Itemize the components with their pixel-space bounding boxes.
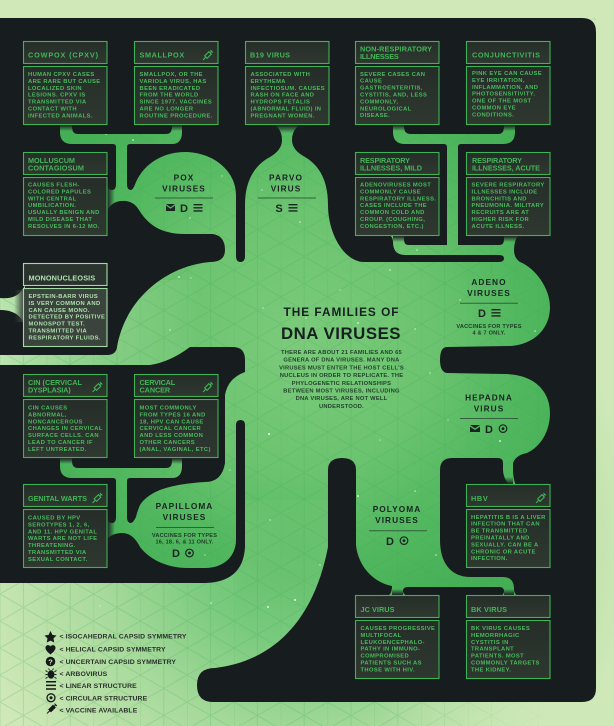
panel: cin: DYSPLASIA) xyxy=(28,385,71,394)
intro paragraph: VIRUSES MUST ENTER THE HOST CELL'S xyxy=(279,365,404,371)
intro paragraph: PHYLOGENETIC RELATIONSHIPS xyxy=(292,381,391,387)
panel: conjunctivitis: ONE OF THE MOST xyxy=(472,99,532,105)
panel: genital warts: TRANSMITTED VIA xyxy=(28,550,87,556)
panel: cin: LEFT UNTREATED. xyxy=(28,447,87,453)
panel: respiratory illnesses acute: HIGHER RISK FOR xyxy=(472,217,529,223)
panel: cervical cancer: OTHER CANCERS xyxy=(140,440,195,446)
panel: respiratory illnesses mild xyxy=(356,152,439,242)
legend item: vaccine: < VACCINE AVAILABLE xyxy=(60,708,138,715)
legend item: isocahedral: < ISOCAHEDRAL CAPSID SYMMETRY xyxy=(60,634,187,641)
panel: non-respiratory illnesses: NON-RESPIRATORY xyxy=(360,45,432,54)
panel: respiratory illnesses acute: ACUTE ILLNESS. xyxy=(472,224,524,230)
panel: cowpox: TRANSMITTED VIA xyxy=(28,100,87,106)
panel: mononucleosis xyxy=(14,264,107,346)
panel: smallpox: SINCE 1977. VACCINES xyxy=(140,100,212,106)
panel: genital warts: WARTS ARE NOT LIFE xyxy=(28,536,97,542)
panel: genital warts: THREATENING. xyxy=(28,543,76,549)
panel: b19 virus: PREGNANT WOMEN. xyxy=(250,113,315,119)
lobe label: pox viruses xyxy=(155,172,213,215)
legend item: linear: < LINEAR STRUCTURE xyxy=(60,683,137,690)
panel: cin: CIN CAUSES xyxy=(28,406,68,412)
panel: bk virus: THE KIDNEY. xyxy=(471,667,511,673)
panel: bk virus: CYSTITIS IN xyxy=(471,640,509,646)
intro paragraph: NUCLEUS IN ORDER TO REPLICATE. THE xyxy=(280,373,403,379)
panel: cowpox: LESIONS. CPXV IS xyxy=(28,93,86,99)
panel: molluscum contagiosum: USUALLY BENIGN AND xyxy=(28,210,100,216)
intro paragraph: GENERA OF DNA VIRUSES. MANY DNA xyxy=(283,358,400,364)
panel: bk virus: HEMORRHAGIC xyxy=(471,633,520,639)
panel: b19 virus: ASSOCIATED WITH xyxy=(250,72,310,78)
panel: smallpox: ROUTINE PROCEDURE. xyxy=(140,113,213,119)
lobe label: polyoma viruses xyxy=(369,504,427,548)
lobe label: papilloma viruses: 16, 18, 6, & 11 ONLY. xyxy=(155,540,214,546)
legend item: helical xyxy=(46,645,166,654)
lobe label: parvo virus: VIRUS xyxy=(271,183,301,193)
panel: hbv: SEXUALLY. CAN BE A xyxy=(471,542,539,548)
lobe label: parvo virus xyxy=(258,172,316,215)
panel: b19 virus xyxy=(246,42,329,133)
panel: cin: SURFACE CELLS. CAN xyxy=(28,433,99,439)
panel: smallpox: VARIOLA VIRUS, HAS xyxy=(140,79,207,85)
panel: cowpox: LOCALIZED SKIN xyxy=(28,86,82,92)
legend item: isocahedral xyxy=(44,631,187,642)
lobe label: papilloma viruses xyxy=(152,501,217,560)
panel: molluscum contagiosum: MILD DISEASE THAT xyxy=(28,217,92,223)
panel: non-respiratory illnesses: CAUSE xyxy=(360,79,382,85)
panel: jc virus: PATHY IN IMMUNO- xyxy=(360,647,420,653)
legend item: helical: < HELICAL CAPSID SYMMETRY xyxy=(60,646,166,654)
panel: jc virus: PATIENTS SUCH AS xyxy=(360,660,422,666)
panel: respiratory illnesses mild: CROUP. (COUGHING, xyxy=(360,217,425,223)
panel: cowpox xyxy=(24,42,107,131)
lobe label: adeno viruses: ADENO xyxy=(471,277,507,287)
panel: hbv: CHRONIC OR ACUTE xyxy=(471,549,536,555)
lobe label: papilloma viruses: VIRUSES xyxy=(163,512,206,522)
panel: respiratory illnesses mild: ADENOVIRUSES MOST xyxy=(360,182,431,188)
panel: b19 virus: ERYTHEMA xyxy=(250,79,286,85)
panel: molluscum contagiosum: CAUSES FLESH- xyxy=(28,182,80,188)
panel: respiratory illnesses acute: SEVERE RESPIRATORY xyxy=(472,182,545,188)
lobe label: adeno viruses xyxy=(456,277,522,336)
panel: respiratory illnesses acute xyxy=(466,152,550,242)
lobe label: papilloma viruses: PAPILLOMA xyxy=(156,501,213,511)
lobe label: adeno viruses: D xyxy=(478,308,486,320)
panel: respiratory illnesses mild: COMMON COLD AND xyxy=(360,210,425,216)
panel: bk virus: PATIENTS. MOST xyxy=(471,654,524,660)
panel: cowpox: CONTACT WITH xyxy=(28,106,77,112)
legend item: uncertain: < UNCERTAIN CAPSID SYMMETRY xyxy=(60,659,176,666)
panel: respiratory illnesses mild: COMMONLY CAUSE xyxy=(360,189,421,195)
title xyxy=(281,305,401,343)
panel: cin: LEAD TO CANCER IF xyxy=(28,440,93,446)
panel: mononucleosis: EPSTEIN-BARR VIRUS xyxy=(28,294,98,300)
panel: cervical cancer xyxy=(134,374,218,464)
panel: hbv: HEPATITIS B IS A LIVER xyxy=(471,515,546,521)
panel: mononucleosis: DETECTED BY POSITIVE xyxy=(28,315,105,321)
lobe label: adeno viruses: VIRUSES xyxy=(467,288,511,298)
lobe label: papilloma viruses: D xyxy=(172,548,180,560)
legend item: uncertain xyxy=(46,657,176,666)
panel: jc virus: CAUSES PROGRESSIVE xyxy=(360,626,435,632)
panel: non-respiratory illnesses: SEVERE CASES CAN xyxy=(360,72,425,78)
panel: smallpox: FROM THE WORLD xyxy=(140,93,199,99)
lobe label: hepadna virus: D xyxy=(485,424,493,436)
panel: cowpox: INFECTED ANIMALS. xyxy=(28,113,93,119)
panel: cowpox: ARE RARE BUT CAUSE xyxy=(28,79,101,85)
panel: non-respiratory illnesses: ILLNESSES xyxy=(360,52,399,61)
panel: non-respiratory illnesses: NEUROLOGICAL xyxy=(360,106,412,112)
lobe label: hepadna virus: VIRUS xyxy=(474,404,504,414)
panel: cervical cancer: MOST COMMONLY xyxy=(140,406,197,412)
panel: cin: CIN (CERVICAL xyxy=(28,378,83,387)
panel: molluscum contagiosum: MOLLUSCUM xyxy=(28,156,75,165)
panel: non-respiratory illnesses: COMMONLY, xyxy=(360,99,398,105)
panel: genital warts: CAUSED BY HPV xyxy=(28,516,81,522)
lobe label: adeno viruses: 4 & 7 ONLY. xyxy=(472,330,506,336)
panel: respiratory illnesses mild: RESPIRATORY xyxy=(360,156,410,165)
panel: non-respiratory illnesses: GASTROENTERITIS, xyxy=(360,86,423,92)
panel: cin: NONCANCEROUS xyxy=(28,419,83,425)
intro paragraph: UNDERSTOOD. xyxy=(319,404,364,410)
lattice fade at bottom right xyxy=(380,702,614,726)
panel: cervical cancer: FROM TYPES 16 AND xyxy=(140,412,206,418)
panel: molluscum contagiosum: COLORED PAPULES xyxy=(28,189,91,195)
panel: respiratory illnesses acute: RECRUITS ARE AT xyxy=(472,210,529,216)
lobe label: polyoma viruses: D xyxy=(386,536,394,548)
legend item: uncertain: ? xyxy=(48,657,53,666)
panel: smallpox xyxy=(134,42,218,131)
lobe label: pox viruses: VIRUSES xyxy=(162,183,206,193)
panel: smallpox: SMALLPOX xyxy=(140,51,184,60)
panel: genital warts: SEROTYPES 1, 2, 6, xyxy=(28,522,90,528)
virus body colour field xyxy=(0,30,590,625)
panel: b19 virus: INFECTIOSUM. CAUSES xyxy=(250,86,325,92)
panel: molluscum contagiosum: UMBILICATION. xyxy=(28,203,76,209)
panel: bk virus: TRANSPLANT xyxy=(471,647,514,653)
panel: conjunctivitis: COMMON EYE xyxy=(472,106,516,112)
panel: cervical cancer: AND LESS COMMON xyxy=(140,433,203,439)
panel: cowpox: HUMAN CPXV CASES xyxy=(28,72,95,78)
panel: genital warts: AND 11. HPV GENITAL xyxy=(28,529,97,535)
panel: conjunctivitis: PINK EYE CAN CAUSE xyxy=(472,71,542,77)
panel: respiratory illnesses acute: ILLNESSES INCLUDE xyxy=(472,189,538,195)
lobe label: hepadna virus xyxy=(460,393,518,436)
panel: hbv: INFECTION THAT CAN xyxy=(471,522,540,528)
panel: cowpox: COWPOX (CPXV) xyxy=(28,51,99,60)
sparkle specks xyxy=(99,133,536,608)
legend item: circular: < CIRCULAR STRUCTURE xyxy=(60,695,148,702)
intro paragraph: THERE ARE ABOUT 21 FAMILIES AND 65 xyxy=(281,350,402,356)
panel: mononucleosis: RESPIRATORY FLUIDS. xyxy=(28,335,101,341)
panel: jc virus: THOSE WITH HIV. xyxy=(360,667,415,673)
lobe label: polyoma viruses: POLYOMA xyxy=(373,504,421,514)
panel: respiratory illnesses acute: BRONCHITIS AND xyxy=(472,196,527,202)
lobe label: pox viruses: D xyxy=(180,203,188,215)
panel: jc virus: LEUKOENCEPHALO- xyxy=(360,640,425,646)
panel: hbv: PREINATALLY AND xyxy=(471,536,530,542)
panel: cin xyxy=(24,374,107,464)
panel: jc virus xyxy=(356,589,439,678)
panel: b19 virus: B19 VIRUS xyxy=(250,51,290,60)
legend item: arbovirus xyxy=(46,668,108,679)
panel: genital warts: SEXUAL CONTACT. xyxy=(28,557,88,563)
panel: conjunctivitis: CONJUNCTIVITIS xyxy=(472,51,540,60)
panel: respiratory illnesses acute: RESPIRATORY xyxy=(472,156,522,165)
panel: respiratory illnesses mild: RESPIRATORY ILLNESS. xyxy=(360,196,436,202)
panel: conjunctivitis: PHOTOSENSITIVITY. xyxy=(472,92,535,98)
lobe label: papilloma viruses: VACCINES FOR TYPES xyxy=(152,533,217,539)
panel: hbv xyxy=(466,477,550,568)
panel: cervical cancer: (ANAL, VAGINAL, ETC) xyxy=(140,447,211,453)
panel: jc virus: JC VIRUS xyxy=(360,605,395,614)
panel: mononucleosis: MONOSPOT TEST. xyxy=(28,322,85,328)
panel: smallpox: BEEN ERADICATED xyxy=(140,86,200,92)
panel: cin: ABNORMAL, xyxy=(28,412,67,418)
panel: cervical cancer: CERVICAL xyxy=(140,378,176,387)
panel: conjunctivitis: CONDITIONS. xyxy=(472,112,514,118)
lobe label: polyoma viruses: VIRUSES xyxy=(375,515,419,525)
lobe label: parvo virus: S xyxy=(275,203,283,215)
panel: cervical cancer: 18, HPV CAN CAUSE xyxy=(140,419,204,425)
panel: molluscum contagiosum: RESOLVES IN 6-12 MO. xyxy=(28,224,100,230)
panel: bk virus xyxy=(466,589,550,678)
panel: genital warts: GENITAL WARTS xyxy=(28,494,87,503)
panel: respiratory illnesses mild: CASES INCLUDE THE xyxy=(360,203,427,209)
panel: smallpox: SMALLPOX, OR THE xyxy=(140,72,203,78)
panel: cin: CHANGES IN CERVICAL xyxy=(28,426,103,432)
panel: non-respiratory illnesses xyxy=(356,42,439,131)
panel: molluscum contagiosum xyxy=(24,152,115,236)
panel: respiratory illnesses acute: PNEUMONIA. MILITARY xyxy=(472,203,544,209)
panel: bk virus: BK VIRUS CAUSES xyxy=(471,626,530,632)
intro paragraph: DNA VIRUSES, ARE NOT WELL xyxy=(296,396,388,402)
panel: respiratory illnesses acute: ILLNESSES, ACUTE xyxy=(472,163,540,172)
panel: cervical cancer: CANCER xyxy=(140,385,171,394)
panel: mononucleosis: TRANSMITTED VIA xyxy=(28,328,87,334)
panel: conjunctivitis: EYE IRRITATION, xyxy=(472,78,525,84)
legend item: vaccine xyxy=(46,704,138,715)
title: THE FAMILIES OF xyxy=(284,305,399,319)
intro paragraph: BETWEEN MOST VIRUSES, INCLUDING xyxy=(283,388,400,394)
panel: jc virus: COMPROMISED xyxy=(360,654,409,660)
panel: molluscum contagiosum: CONTAGIOSUM xyxy=(28,163,84,172)
panel: genital warts xyxy=(24,484,115,568)
panel: respiratory illnesses mild: ILLNESSES, MILD xyxy=(360,163,422,172)
panel: mononucleosis: MONONUCLEOSIS xyxy=(28,274,95,282)
panel: non-respiratory illnesses: DISEASE. xyxy=(360,113,390,119)
panel: non-respiratory illnesses: CYSTITIS, AND, LESS xyxy=(360,92,427,98)
panel: jc virus: MULTIFOCAL xyxy=(360,633,402,639)
lobe label: parvo virus: PARVO xyxy=(269,172,303,182)
lobe label: adeno viruses: VACCINES FOR TYPES xyxy=(456,324,522,330)
panel: bk virus: COMMONLY TARGETS xyxy=(471,660,540,666)
panel: hbv: INFECTION. xyxy=(471,556,508,562)
panel: mononucleosis: IS VERY COMMON AND xyxy=(28,301,101,307)
panel: mononucleosis: CAN CAUSE MONO. xyxy=(28,308,90,314)
panel: hbv: BE TRANSMITTED xyxy=(471,529,528,535)
panel: conjunctivitis: INFLAMMATION, AND xyxy=(472,85,538,91)
panel: respiratory illnesses mild: CONGESTION, ETC.) xyxy=(360,224,424,230)
panel: b19 virus: (ABNORMAL FLUID) IN xyxy=(250,106,321,112)
lobe label: hepadna virus: HEPADNA xyxy=(465,393,513,403)
legend xyxy=(44,631,187,715)
panel: smallpox: ARE NO LONGER xyxy=(140,106,194,112)
panel: b19 virus: HYDROPS FETALIS xyxy=(250,100,310,106)
legend item: linear xyxy=(46,681,137,690)
panel: hbv: HBV xyxy=(471,494,488,503)
panel: bk virus: BK VIRUS xyxy=(471,605,507,614)
lobe label: pox viruses: POX xyxy=(174,172,194,182)
panel: cervical cancer: CERVICAL CANCER xyxy=(140,426,201,432)
panel: b19 virus: RASH ON FACE AND xyxy=(250,93,314,99)
panel: conjunctivitis xyxy=(466,42,550,131)
legend item: arbovirus: < ARBOVIRUS xyxy=(60,671,108,678)
panel: molluscum contagiosum: WITH CENTRAL xyxy=(28,196,77,202)
title: DNA VIRUSES xyxy=(281,324,401,343)
